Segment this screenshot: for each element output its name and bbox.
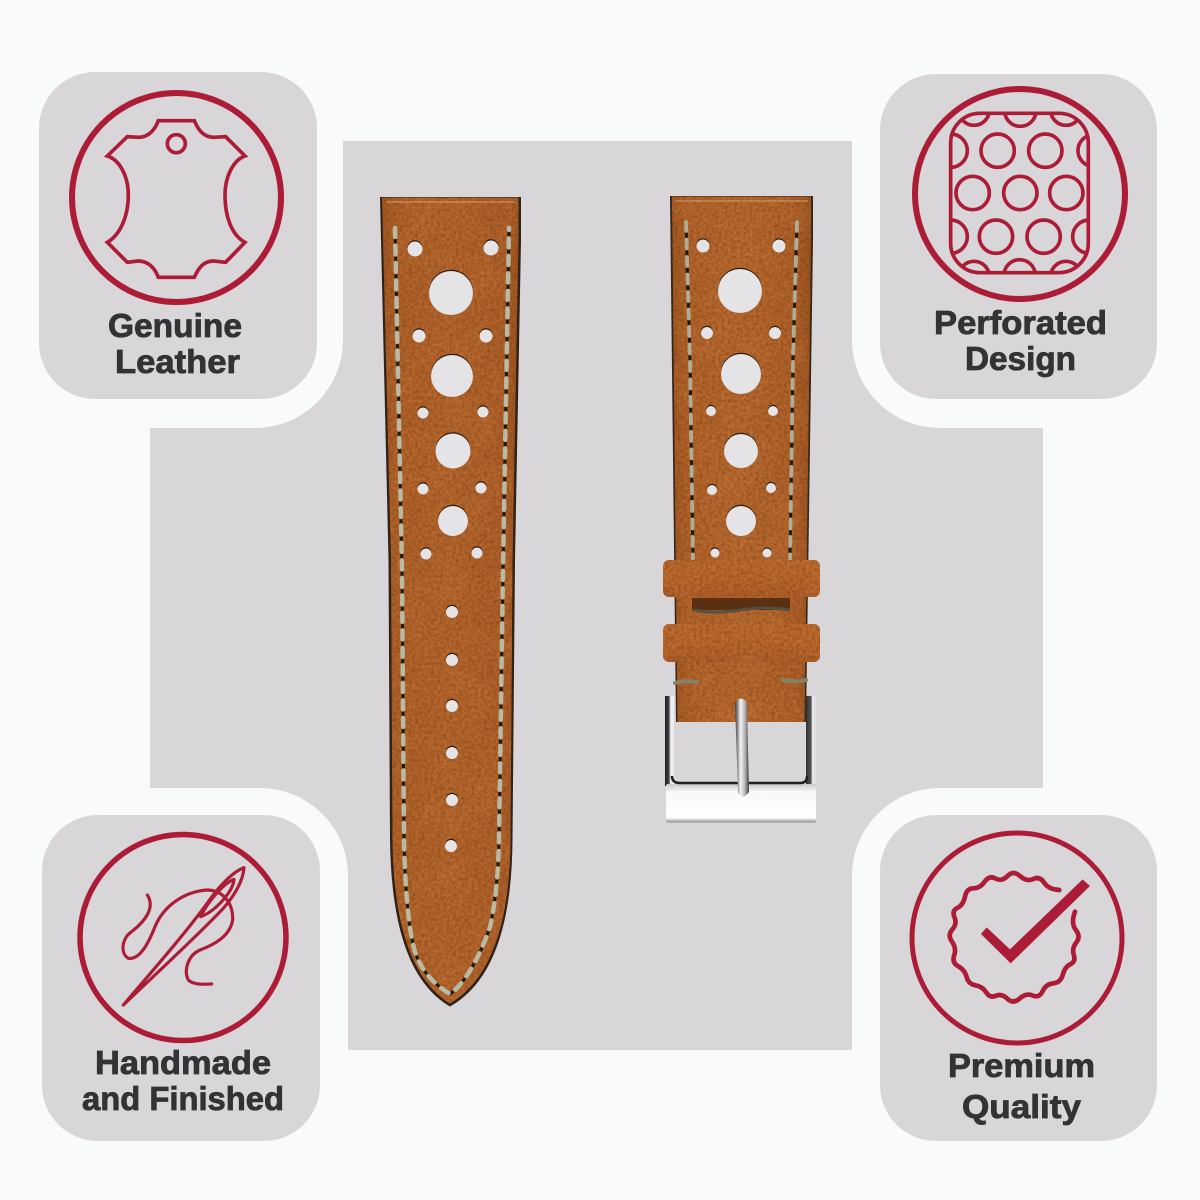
heading: premium quality: Quality [962,1088,1082,1125]
heading: genuine leather: Leather [115,343,240,380]
icon: needle and thread [80,834,286,1040]
icon: perforated pattern [915,89,1125,299]
strap leather body [672,196,811,722]
heading: perforated design: Design [965,340,1076,377]
strap edge [380,197,521,1006]
heading: handmade and finished [82,1044,284,1117]
heading: premium quality: Premium [948,1047,1095,1084]
left watch strap: long perforated piece [380,197,521,1006]
heading: genuine leather [108,307,242,380]
keeper loop 1 [663,560,820,597]
strap leather body [382,198,518,1004]
heading: handmade and finished: Handmade [95,1044,271,1081]
left strap stitching [395,228,509,994]
keeper loop 2 [663,624,820,662]
buckle pin [735,698,749,796]
buckle frame [665,696,816,822]
icon: quality check badge [912,833,1122,1043]
top edge highlight [676,200,808,202]
heading: genuine leather: Genuine [108,307,242,344]
panel: handmade and finished [42,815,320,1141]
right strap stitching [686,222,797,560]
strap edge [670,196,813,722]
dark recess between keepers [692,598,790,612]
heading: premium quality [948,1047,1095,1125]
loose threads [675,680,806,683]
left strap perforations [408,239,498,852]
heading: perforated design [934,304,1107,377]
right watch strap: buckle piece [663,196,820,822]
panel: genuine leather [39,72,317,399]
icon: leather hide [72,93,281,302]
top edge highlight [386,201,515,203]
heading: handmade and finished: and Finished [82,1080,284,1117]
right strap perforations [696,238,786,558]
panel: perforated design [880,74,1157,399]
panel: premium quality [880,815,1157,1141]
heading: perforated design: Perforated [934,304,1107,341]
